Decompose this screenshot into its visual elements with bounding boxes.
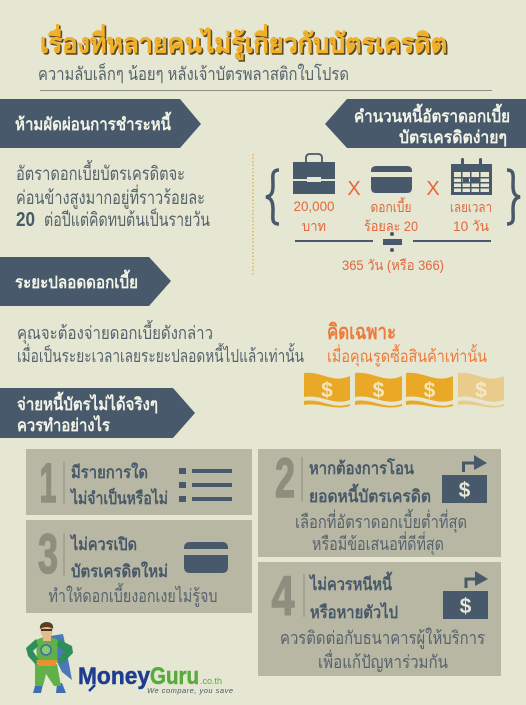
symbol: multiply: X (426, 178, 440, 200)
text: interest rate: ต่อปีแต่คิดทบต้นเป็นรายวัน (44, 207, 210, 231)
panel 2 (258, 446, 501, 557)
banner: grace period (0, 257, 171, 306)
banner: no late payment (0, 99, 201, 148)
icon: right brace (507, 170, 520, 224)
panel 4: ไม่ควรหนีหนี้ (308, 571, 392, 594)
banner: no late payment: ห้ามผัดผ่อนการชำระหนี้ (15, 111, 171, 134)
icon: money row: $ (424, 379, 436, 402)
icon: money row: $ (475, 379, 487, 402)
callout: only when you swipe: คิดเฉพาะ (327, 321, 396, 344)
title: เรื่องที่หลายคนไม่รู้เกี่ยวกับบัตรเครดิต (42, 25, 448, 62)
icon: briefcase (293, 154, 335, 194)
banner: calculate interest (325, 99, 526, 148)
labels: ดอกเบี้ย (370, 197, 412, 215)
wordmark (78, 663, 222, 690)
logo: MoneyGuru (26, 622, 233, 695)
text: interest rate: ค่อนข้างสูงมากอยู่ที่ราวร้อยละ (16, 184, 205, 209)
symbol: multiply: X (347, 178, 361, 200)
panel 2: ยอดหนี้บัตรเครดิต (309, 483, 431, 506)
labels (294, 197, 492, 234)
icon: list (179, 468, 232, 502)
text: grace period: คุณจะต้องจ่ายดอกเบี้ยดังกล่าว (17, 320, 213, 344)
labels: 10 วัน (453, 218, 489, 234)
labels: 20,000 (294, 198, 335, 214)
labels: บาท (302, 218, 326, 234)
icon: credit card (184, 542, 228, 573)
icon: money transfer: $ (460, 595, 472, 618)
panel 2: หากต้องการโอน (309, 458, 414, 478)
panel 3: ไม่ควรเปิด (69, 534, 137, 554)
banner: grace period: ระยะปลอดดอกเบี้ย (15, 269, 138, 292)
panel 1 (26, 449, 252, 515)
icon: superhero mascot (26, 622, 73, 693)
text: interest rate: 20 (16, 209, 35, 231)
callout: only when you swipe: เมื่อคุณรูดซื้อสินค้าเท่านั้น (327, 344, 487, 367)
divide line and symbol (295, 232, 491, 252)
wordmark: Money (78, 663, 151, 690)
subtitle: ความลับเล็กๆ น้อยๆ หลังเจ้าบัตรพลาสติกใบโปรด (38, 62, 349, 84)
panel 3 (26, 520, 252, 613)
callout: only when you swipe (327, 321, 487, 367)
panel 4: หรือหายตัวไป (310, 602, 398, 622)
wordmark: .co.th (200, 676, 222, 686)
panel 4: 4 (272, 564, 294, 627)
text: grace period (17, 320, 304, 366)
icon: magnifier handle (89, 685, 95, 691)
icon: money transfer (443, 571, 488, 619)
panel 1: 1 (40, 451, 56, 514)
tagline: We compare, you save (147, 686, 233, 695)
text: grace period: เมื่อเป็นระยะเวลาเลยระยะปลอดหนี้ไปแล้วเท่านั้น (17, 343, 304, 366)
panel 3: 3 (38, 522, 58, 585)
panel 2: เลือกที่อัตราดอกเบี้ยต่ำที่สุด (295, 509, 467, 533)
banner: calculate interest: คำนวนหนี้อัตราดอกเบี้ย (354, 103, 510, 126)
icon: left brace (266, 170, 279, 224)
panel 4 (258, 562, 501, 676)
panel 1: มีรายการใด (71, 462, 148, 482)
icon: money row: $ (373, 379, 385, 402)
labels: เลยเวลา (450, 199, 492, 215)
labels: ร้อยละ 20 (364, 218, 418, 234)
banner: cannot pay: จ่ายหนี้บัตรไม่ได้จริงๆ (17, 391, 158, 414)
text: interest rate: อัตราดอกเบี้ยบัตรเครดิตจะ (16, 160, 185, 185)
icon: money row (304, 373, 504, 408)
panel 3: บัตรเครดิตใหม่ (71, 561, 168, 581)
banner: calculate interest: บัตรเครดิตง่ายๆ (399, 128, 507, 147)
icon: money transfer: $ (459, 479, 471, 502)
panel 1: ไม่จำเป็นหรือไม่ (69, 486, 168, 508)
label: days: 365 วัน (หรือ 366) (342, 257, 444, 273)
icon: money row: $ (321, 379, 333, 402)
text: interest rate (16, 160, 210, 231)
banner: cannot pay (0, 388, 195, 438)
icon: credit card (371, 166, 412, 193)
banner: cannot pay: ควรทำอย่างไร (17, 415, 111, 435)
wordmark: Guru (150, 663, 199, 690)
panel 2: หรือมีข้อเสนอที่ดีที่สุด (312, 531, 444, 555)
panel 4: ควรติดต่อกับธนาคารผู้ให้บริการ (280, 627, 485, 649)
formula (266, 154, 520, 273)
panel 3: ทำให้ดอกเบี้ยงอกเงยไม่รู้จบ (48, 583, 218, 607)
title: เรื่องที่หลายคนไม่รู้เกี่ยวกับบัตรเครดิต (40, 24, 447, 60)
panel 2: 2 (275, 446, 295, 509)
icon: calendar (451, 158, 492, 195)
panel 4: เพื่อแก้ปัญหาร่วมกัน (318, 649, 448, 672)
icon: money transfer (442, 455, 487, 503)
